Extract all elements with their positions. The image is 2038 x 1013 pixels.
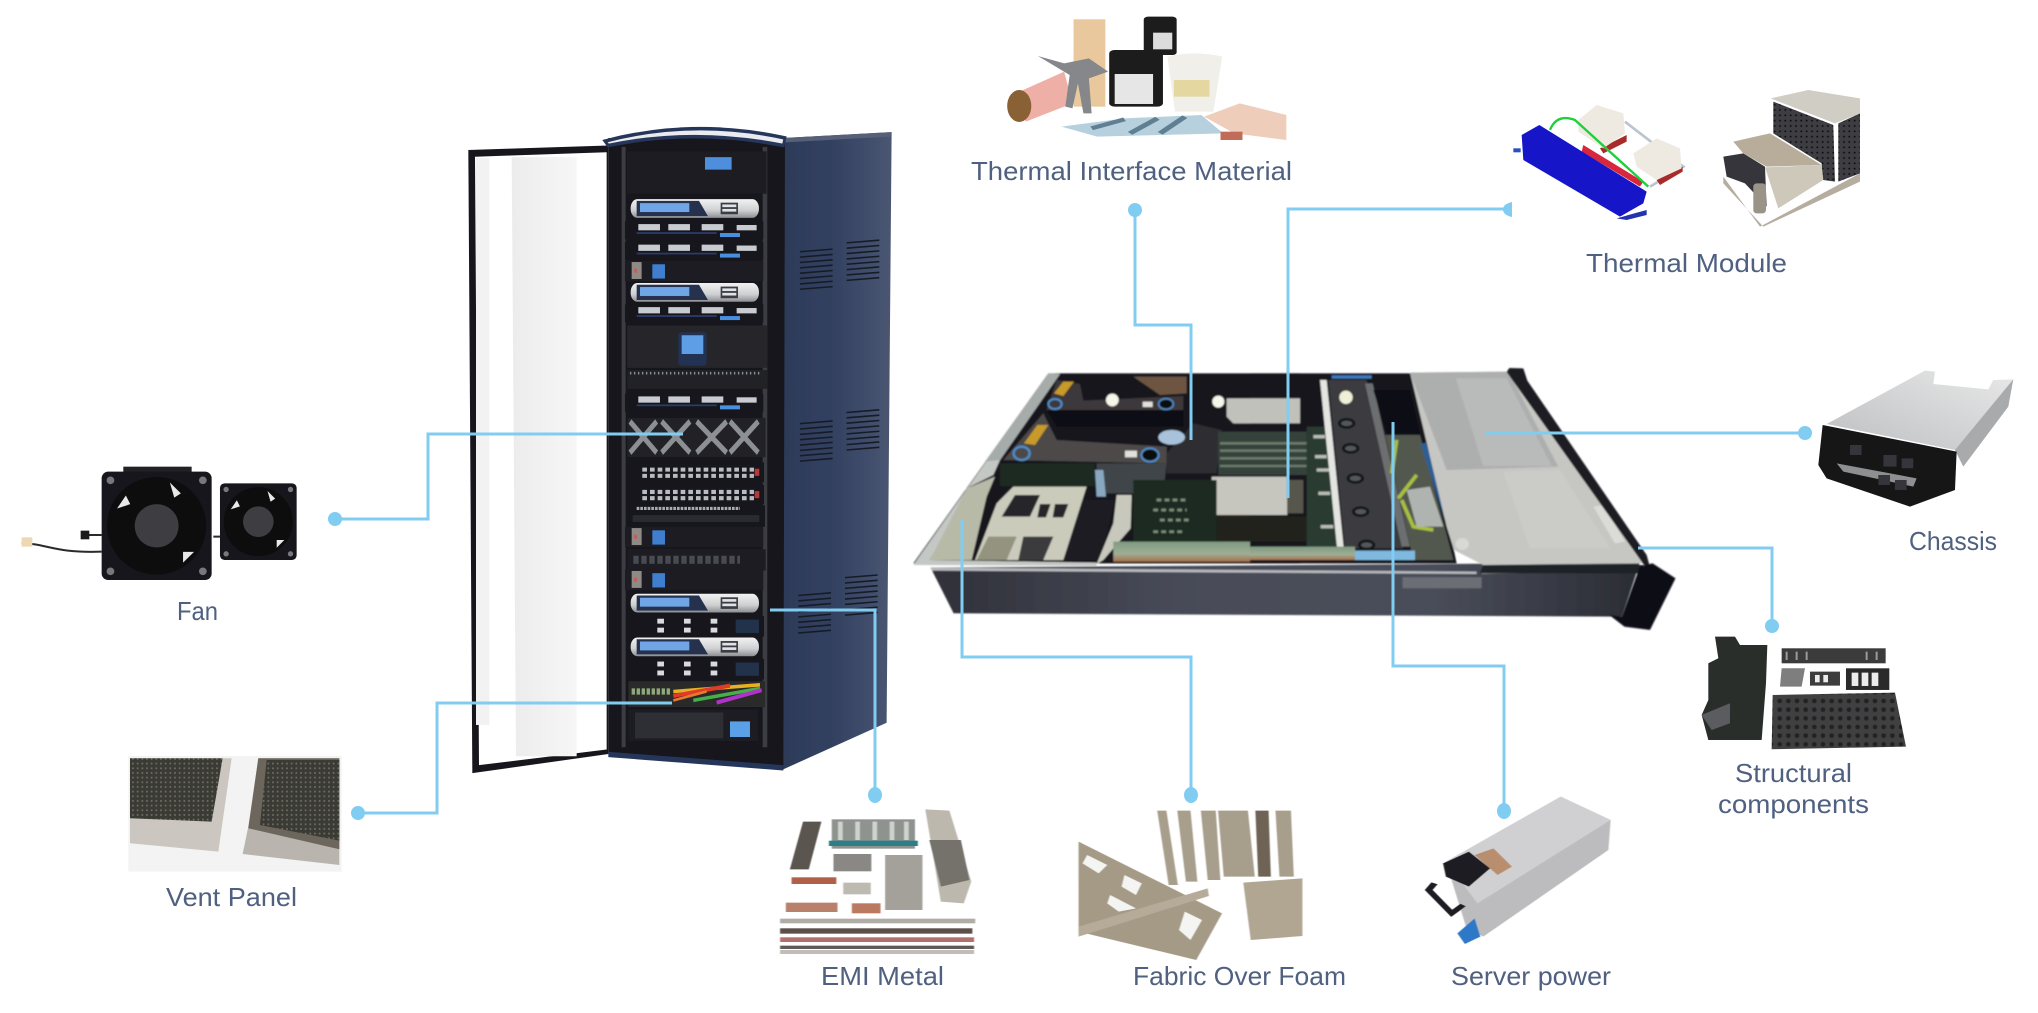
mid card area bbox=[1000, 463, 1095, 486]
label: Server power: Server power bbox=[1451, 961, 1611, 991]
icon: vent panel photo bbox=[128, 756, 342, 872]
connector: structural components bbox=[1638, 548, 1779, 633]
metal cage bbox=[930, 477, 1132, 564]
riser cards bbox=[1003, 377, 1200, 463]
fan unit in rack bbox=[627, 418, 766, 457]
cable bay bbox=[1385, 435, 1453, 560]
label: Thermal Module: Thermal Module bbox=[1586, 248, 1787, 278]
icon: structural components bbox=[1702, 637, 1906, 749]
connector: EMI metal bbox=[770, 610, 882, 803]
connector: fabric over foam bbox=[962, 520, 1198, 803]
connector: fan bbox=[328, 434, 683, 526]
server chassis illustration bbox=[913, 368, 1676, 630]
server interior left half bbox=[913, 373, 1300, 566]
CPU heat sinks and memory bbox=[1212, 398, 1300, 542]
connector: chassis bbox=[1485, 426, 1812, 440]
connector: thermal module bbox=[1288, 202, 1512, 498]
connector: vent panel bbox=[351, 703, 672, 820]
colored cable unit bbox=[628, 681, 765, 707]
icon: fans bbox=[22, 467, 297, 580]
icon: thermal module liquid cooler bbox=[1513, 105, 1683, 220]
label: Thermal Interface Material: Thermal Interface Material bbox=[971, 156, 1292, 186]
open glass door bbox=[468, 146, 608, 773]
front handle bbox=[1609, 563, 1676, 630]
rack side panel bbox=[783, 132, 892, 770]
connector: thermal interface material bbox=[1128, 203, 1191, 440]
icon: fabric over foam parts bbox=[1079, 811, 1302, 960]
fan wall bbox=[1320, 375, 1403, 551]
black rail bbox=[1507, 368, 1652, 573]
silver top cover bbox=[1410, 372, 1643, 565]
label: Fan: Fan bbox=[177, 596, 218, 626]
label: Vent Panel: Vent Panel bbox=[166, 882, 297, 912]
label: Structural components: components bbox=[1718, 789, 1869, 819]
label: Fabric Over Foam: Fabric Over Foam bbox=[1133, 961, 1346, 991]
server interior right half bbox=[1250, 368, 1652, 573]
icon: server power supply bbox=[1429, 797, 1611, 944]
label: Structural components bbox=[1718, 758, 1869, 819]
glass lid rim bbox=[913, 373, 1097, 566]
label: Chassis: Chassis bbox=[1909, 526, 1997, 556]
icon: EMI metal parts bbox=[780, 809, 975, 954]
icon: chassis drawer bbox=[1818, 371, 2013, 507]
connector: server power bbox=[1393, 422, 1511, 819]
bottom board strip bbox=[1113, 542, 1300, 562]
icon: heat sink bbox=[1723, 90, 1860, 227]
server front panel bbox=[931, 563, 1640, 617]
air duct bbox=[1167, 423, 1222, 473]
rack front frame bbox=[605, 129, 785, 770]
label: EMI Metal: EMI Metal bbox=[821, 961, 944, 991]
rack units bbox=[625, 151, 767, 741]
label: Structural components: Structural bbox=[1735, 758, 1852, 788]
icon: thermal interface materials bbox=[1007, 17, 1286, 140]
server rack illustration bbox=[468, 129, 892, 773]
